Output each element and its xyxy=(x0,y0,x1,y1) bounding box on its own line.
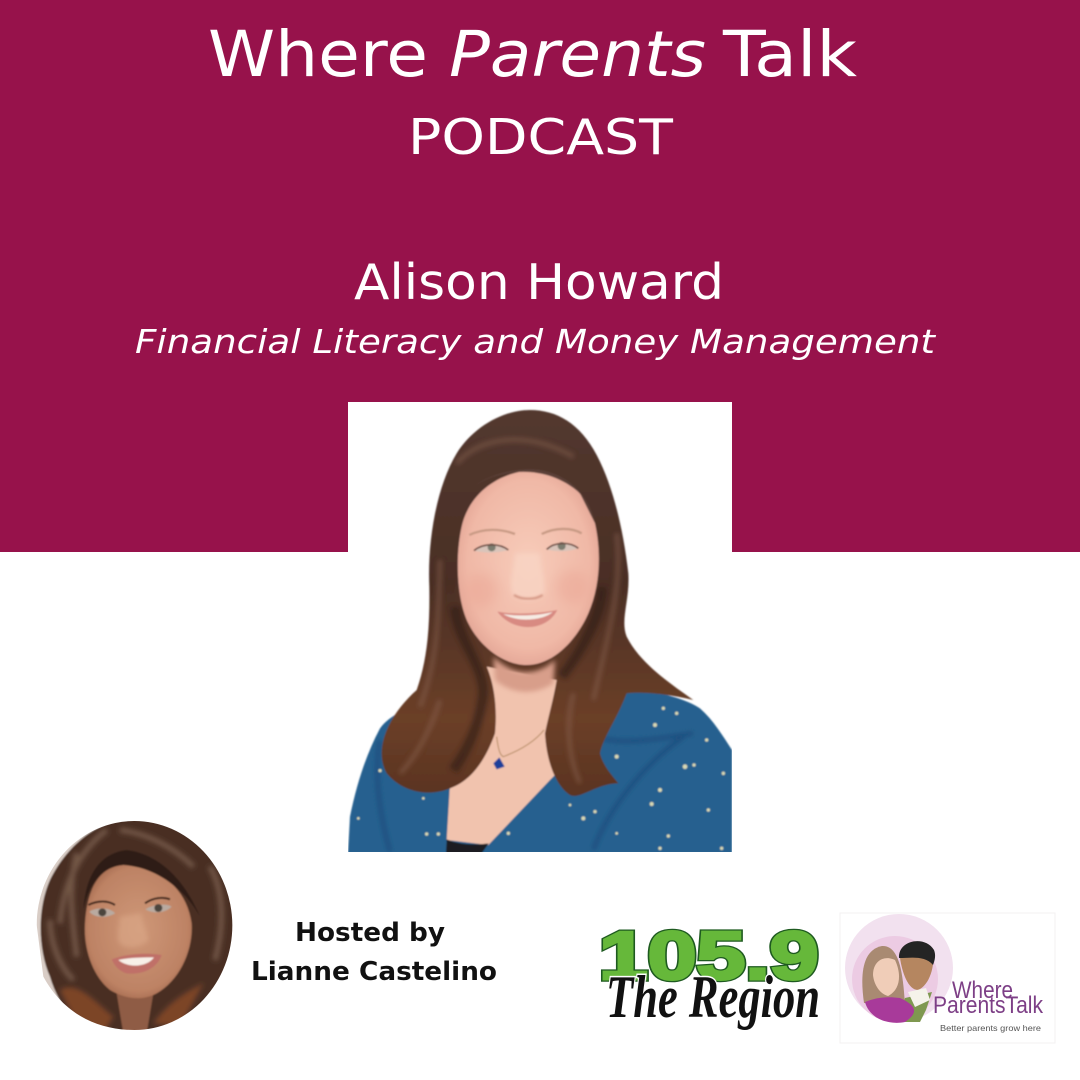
title: Where Parents Talk: Parents xyxy=(449,18,706,91)
maroon header panel xyxy=(0,0,1080,552)
hair xyxy=(41,818,237,1037)
necklace xyxy=(493,730,544,769)
hair parting over forehead xyxy=(501,470,596,522)
logo tagline: Better parents grow here xyxy=(940,1023,1041,1033)
smile xyxy=(497,610,557,627)
brows xyxy=(469,529,582,535)
logo: Where Parents Talk xyxy=(840,913,1055,1043)
smile xyxy=(112,954,162,974)
title: Where Parents Talk: Talk xyxy=(722,18,858,91)
hair highlights xyxy=(50,830,221,980)
camisole xyxy=(446,839,489,853)
logo wordmark: Where xyxy=(952,977,1013,1004)
photo background xyxy=(36,827,102,1002)
blouse shading xyxy=(377,733,693,852)
nose xyxy=(118,915,147,946)
guest portrait: Alison Howard xyxy=(348,402,732,853)
hair lowlights xyxy=(453,587,602,770)
eyes xyxy=(474,542,578,553)
title: Where Parents Talk xyxy=(208,18,858,91)
logo: 105.9 The Region: The Region xyxy=(606,964,820,1030)
nose xyxy=(512,555,544,598)
illustrated woman xyxy=(862,946,914,1023)
illustrated man xyxy=(898,941,935,1022)
neck xyxy=(117,993,153,1033)
eyes xyxy=(88,898,172,917)
blouse xyxy=(348,687,732,853)
hosted by credit: Lianne Castelino xyxy=(251,957,497,987)
hair highlights xyxy=(400,440,618,783)
logo circles xyxy=(845,914,953,1022)
subtitle: podcast: PODCAST xyxy=(408,109,674,166)
logo tile xyxy=(840,913,1055,1043)
hair back xyxy=(382,410,693,796)
neck and chest skin xyxy=(447,653,560,845)
logo: 105.9 The Region xyxy=(599,917,820,1030)
title: Where Parents Talk: Where xyxy=(208,18,428,91)
hosted by credit xyxy=(251,918,497,987)
guest name: Alison Howard xyxy=(354,254,724,311)
face xyxy=(85,865,192,998)
logo: 105.9 The Region: 105.9 xyxy=(599,917,818,994)
host portrait: Lianne Castelino xyxy=(36,821,232,1030)
episode topic: Financial Literacy and Money Management xyxy=(135,322,936,361)
face xyxy=(458,471,599,665)
cheeks xyxy=(470,577,495,602)
under chin shadow xyxy=(493,657,555,692)
logo: 105.9 The Region: 105.9 xyxy=(599,917,818,994)
auburn hair ends xyxy=(59,983,204,1027)
fringe xyxy=(83,850,200,917)
logo: Where Parents Talk: ParentsTalk xyxy=(933,992,1044,1019)
blouse print dots xyxy=(357,707,725,850)
hosted by credit: Hosted by xyxy=(295,918,445,948)
